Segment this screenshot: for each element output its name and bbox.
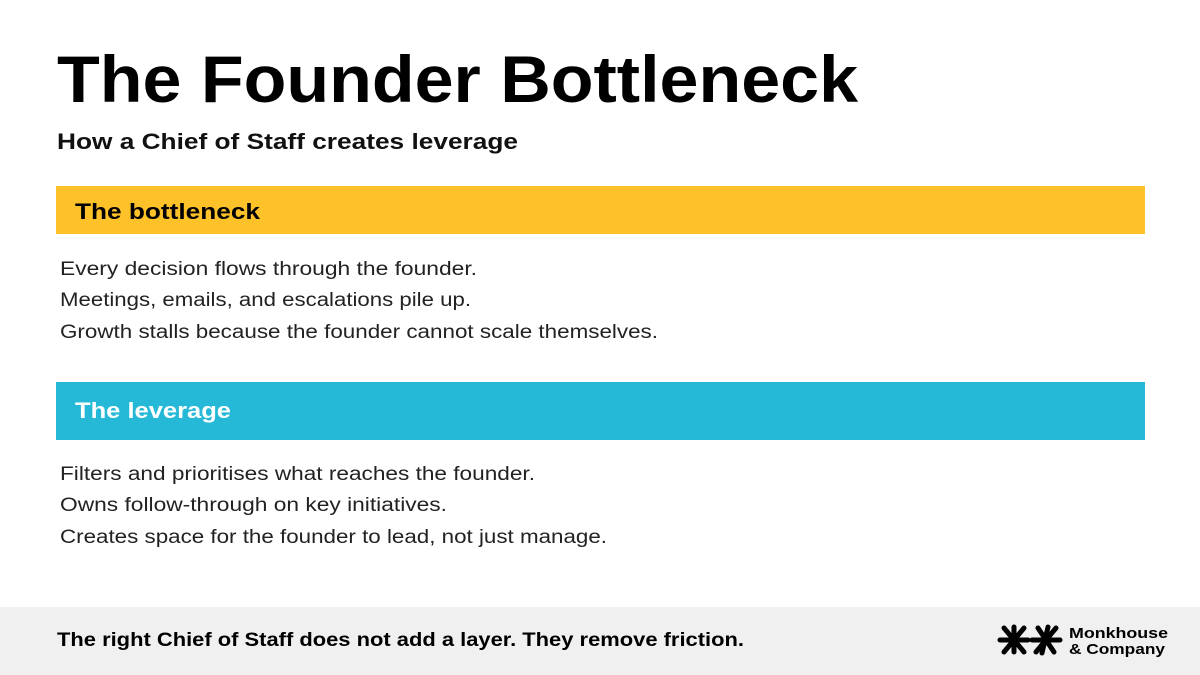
- text block: bottleneck points: [60, 259, 658, 343]
- logo: Monkhouse & Company: & Company: [1069, 641, 1166, 658]
- footer band: [0, 607, 1200, 675]
- heading bar: bottleneck: The bottleneck: [75, 199, 261, 224]
- heading bar: leverage: [56, 382, 1145, 440]
- footer statement: The right Chief of Staff does not add a layer. They remove friction.: [57, 630, 744, 651]
- text block: leverage points: Creates space for the founder to lead, not just manage.: [60, 527, 607, 548]
- heading bar: bottleneck: [56, 186, 1145, 234]
- logo: Monkhouse & Company: [1000, 625, 1168, 658]
- text block: bottleneck points: Every decision flows through the founder.: [60, 259, 477, 280]
- text block: bottleneck points: Meetings, emails, and escalations pile up.: [60, 290, 471, 311]
- logo: Monkhouse & Company: Monkhouse: [1069, 625, 1168, 642]
- panel: leverage: [56, 382, 1145, 548]
- text block: leverage points: Owns follow-through on key initiatives.: [60, 495, 447, 516]
- heading bar: leverage: The leverage: [75, 398, 231, 423]
- subtitle: How a Chief of Staff creates leverage: [57, 129, 518, 154]
- text block: leverage points: Filters and prioritises what reaches the founder.: [60, 464, 535, 485]
- icon: asterisks: [1000, 627, 1060, 653]
- text block: leverage points: [60, 464, 607, 548]
- panel: bottleneck: [56, 186, 1145, 343]
- title: The Founder Bottleneck: [57, 42, 858, 116]
- text block: bottleneck points: Growth stalls because the founder cannot scale themselves.: [60, 322, 658, 343]
